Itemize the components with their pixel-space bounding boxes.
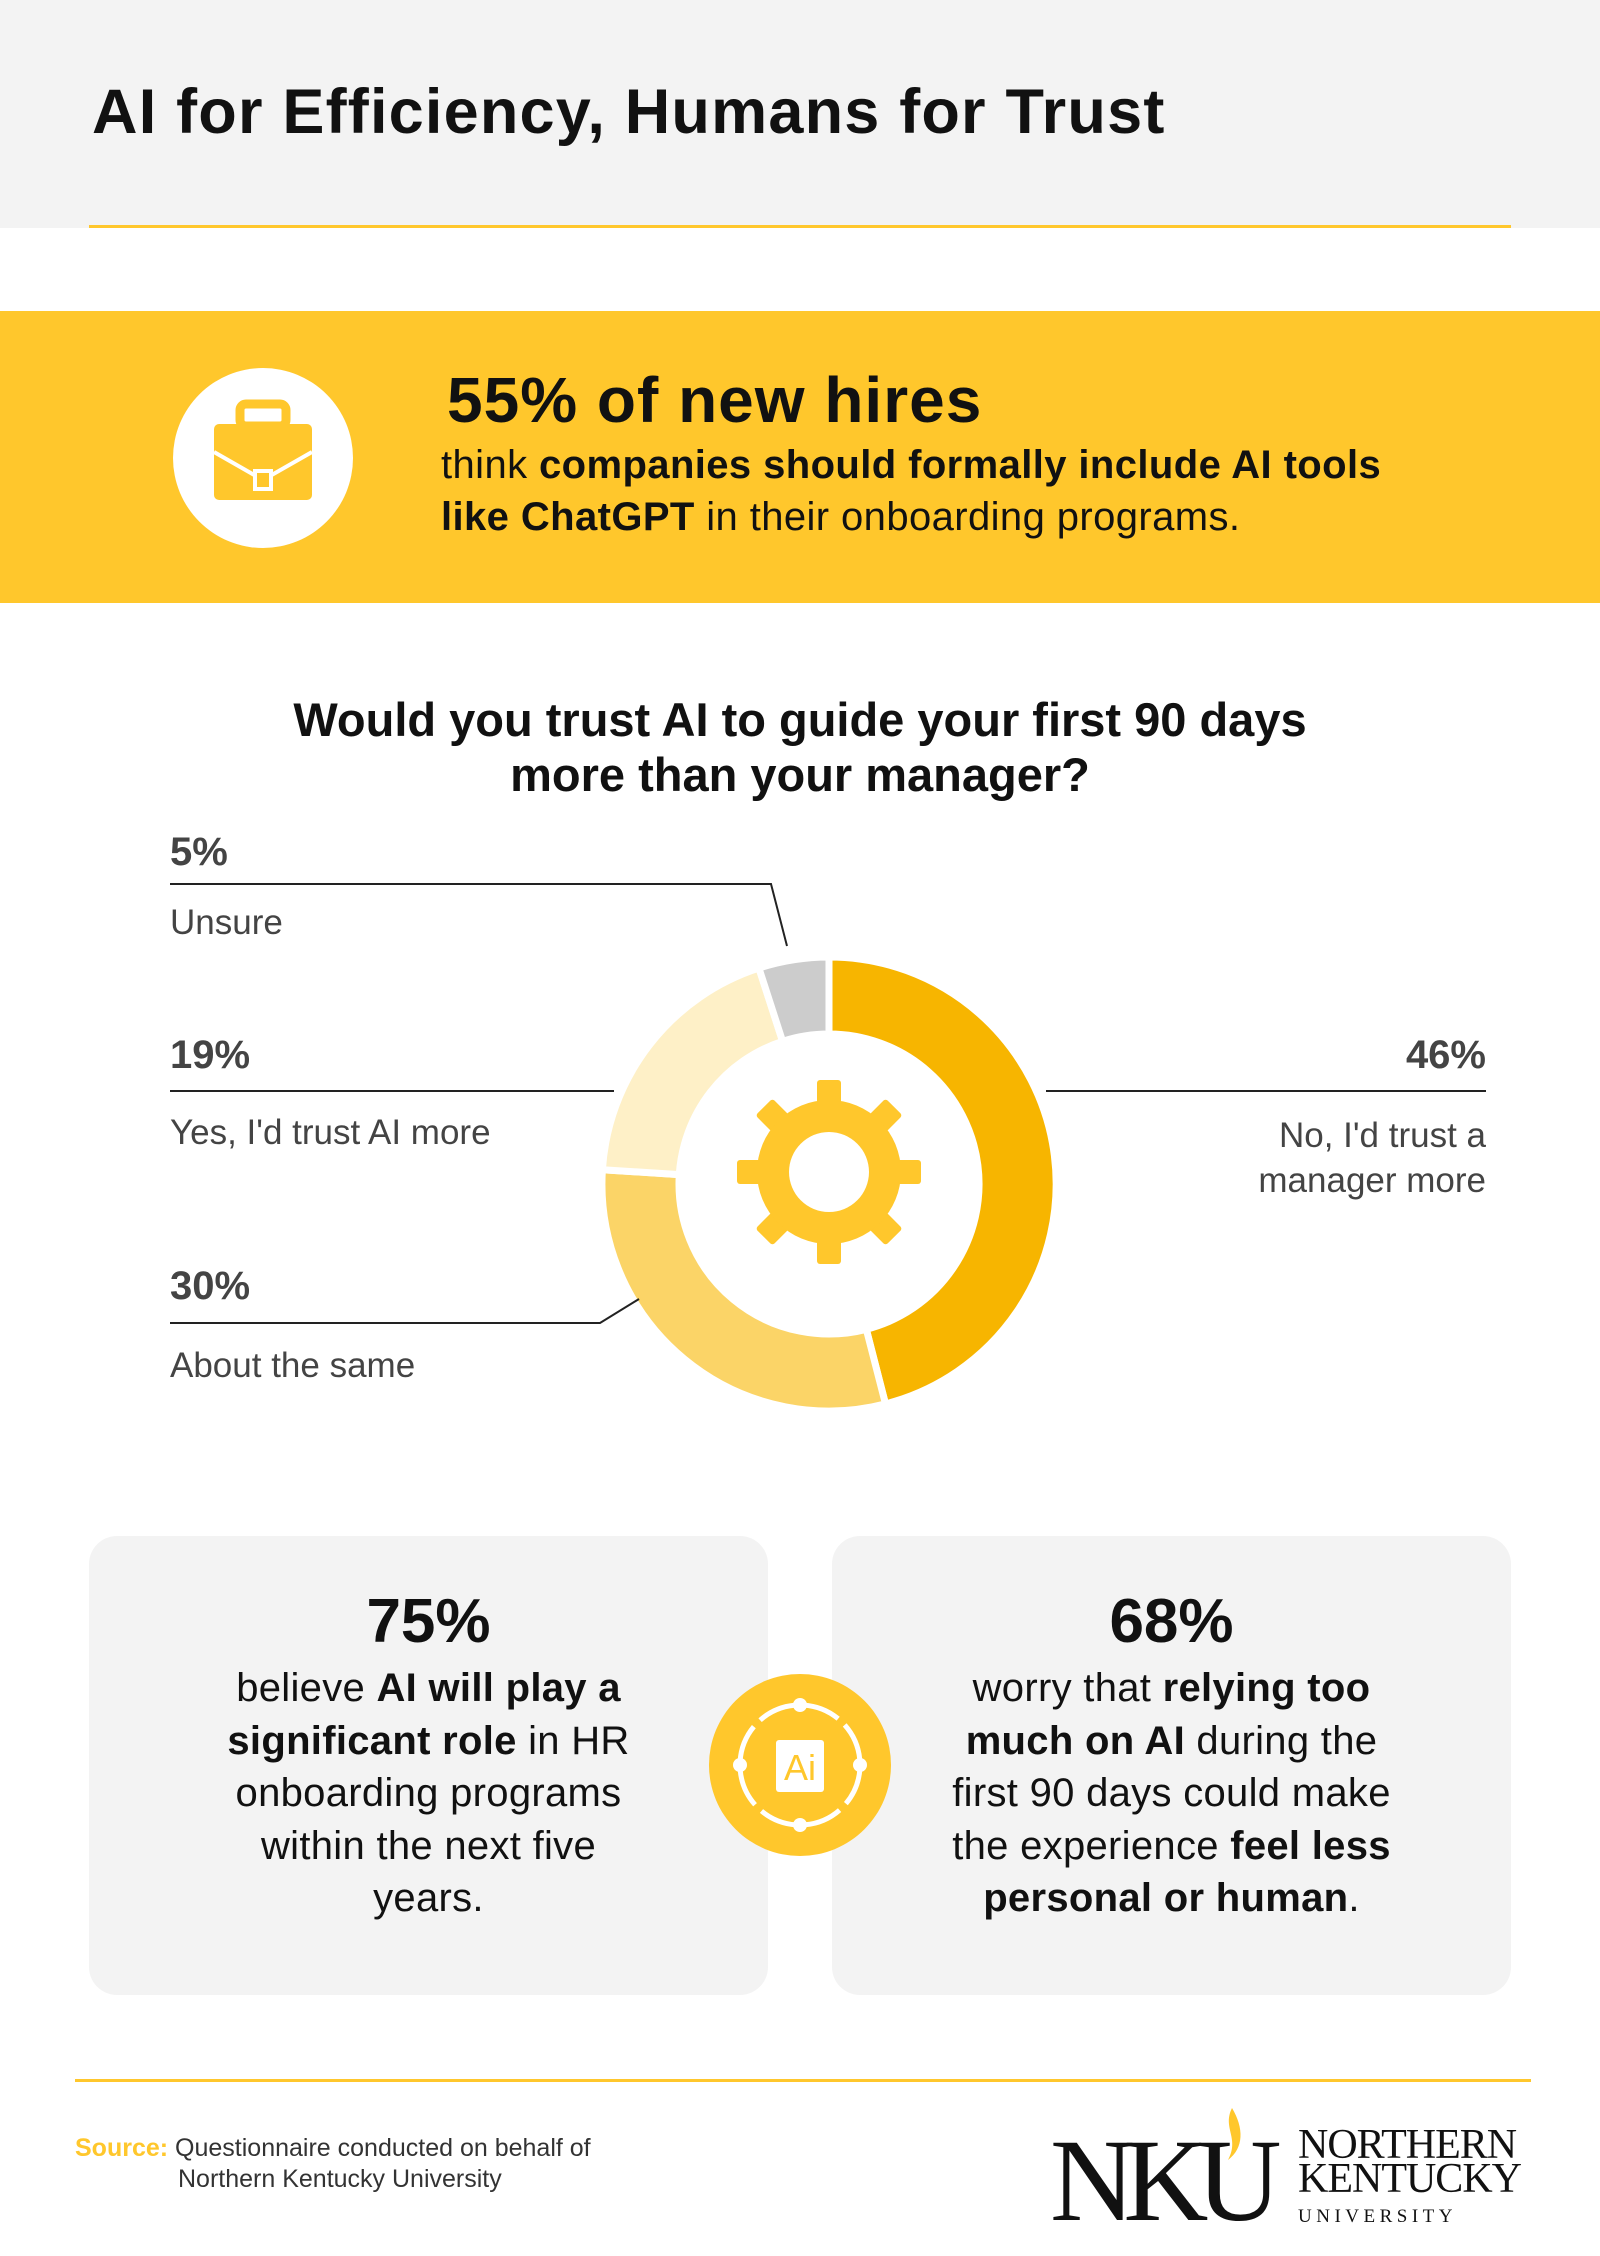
text: [227, 1666, 630, 1920]
stat 68%: 68%: [1109, 1587, 1234, 1656]
label: 46% no: No, I'd trust a: [1279, 1116, 1486, 1155]
chart question heading: Would you trust AI to guide your first 90 days: [293, 693, 1307, 746]
label: 19% yes: [170, 1033, 491, 1152]
source: Source: Questionnaire conducted on behalf of: [75, 2134, 591, 2162]
text: personal or human.: [983, 1876, 1360, 1920]
label: 46% no: [1258, 1033, 1486, 1200]
header background: [0, 0, 1600, 228]
chart question heading: more than your manager?: [510, 748, 1090, 801]
text: the experience feel less: [952, 1824, 1391, 1868]
text: worry that relying too: [973, 1666, 1370, 1710]
text: [952, 1666, 1391, 1920]
label: 46% no: manager more: [1258, 1161, 1486, 1200]
label: 19% yes: Yes, I'd trust AI more: [170, 1113, 491, 1152]
label: 30% same: 30%: [170, 1264, 250, 1308]
label: 30% same: About the same: [170, 1346, 415, 1385]
stat 75%: 75%: [366, 1587, 491, 1656]
icon: AI circle: Ai: [784, 1747, 816, 1788]
logo: NKU: [1050, 2108, 1521, 2230]
text: years.: [373, 1876, 484, 1920]
text: onboarding programs: [236, 1771, 621, 1815]
label: 19% yes: 19%: [170, 1033, 250, 1077]
source: Northern Kentucky University: [178, 2165, 502, 2193]
logo: NKU: KENTUCKY: [1298, 2156, 1521, 2202]
text: first 90 days could make: [952, 1771, 1391, 1815]
title: AI for Efficiency, Humans for Trust: [92, 77, 1166, 147]
panel: 55% banner: [0, 311, 1600, 603]
stat heading: 55% of new hires: [447, 364, 982, 436]
text: within the next five: [261, 1824, 596, 1868]
icon: AI circle: [709, 1674, 891, 1856]
panel: 68% card: [832, 1536, 1511, 1995]
icon: briefcase: [173, 368, 353, 548]
stat text: [441, 443, 1381, 539]
stat text: like ChatGPT in their onboarding programs.: [441, 495, 1240, 539]
source: [75, 2134, 591, 2193]
text: significant role in HR: [227, 1718, 630, 1762]
label: 5% unsure: 5%: [170, 830, 228, 874]
text: much on AI during the: [966, 1718, 1377, 1762]
label: 30% same: [170, 1264, 415, 1385]
text: Unsure: [170, 903, 283, 942]
donut chart: [170, 883, 1486, 1408]
logo: NKU: NORTHERN: [1298, 2122, 1516, 2168]
icon: gear: [737, 1080, 921, 1264]
stat text: think companies should formally include AI tools: [441, 443, 1381, 487]
panel: 75% card: [89, 1536, 768, 1995]
label: 46% no: 46%: [1406, 1033, 1486, 1077]
logo: NKU: UNIVERSITY: [1298, 2206, 1457, 2227]
chart question heading: [293, 693, 1307, 801]
text: believe AI will play a: [236, 1666, 621, 1710]
